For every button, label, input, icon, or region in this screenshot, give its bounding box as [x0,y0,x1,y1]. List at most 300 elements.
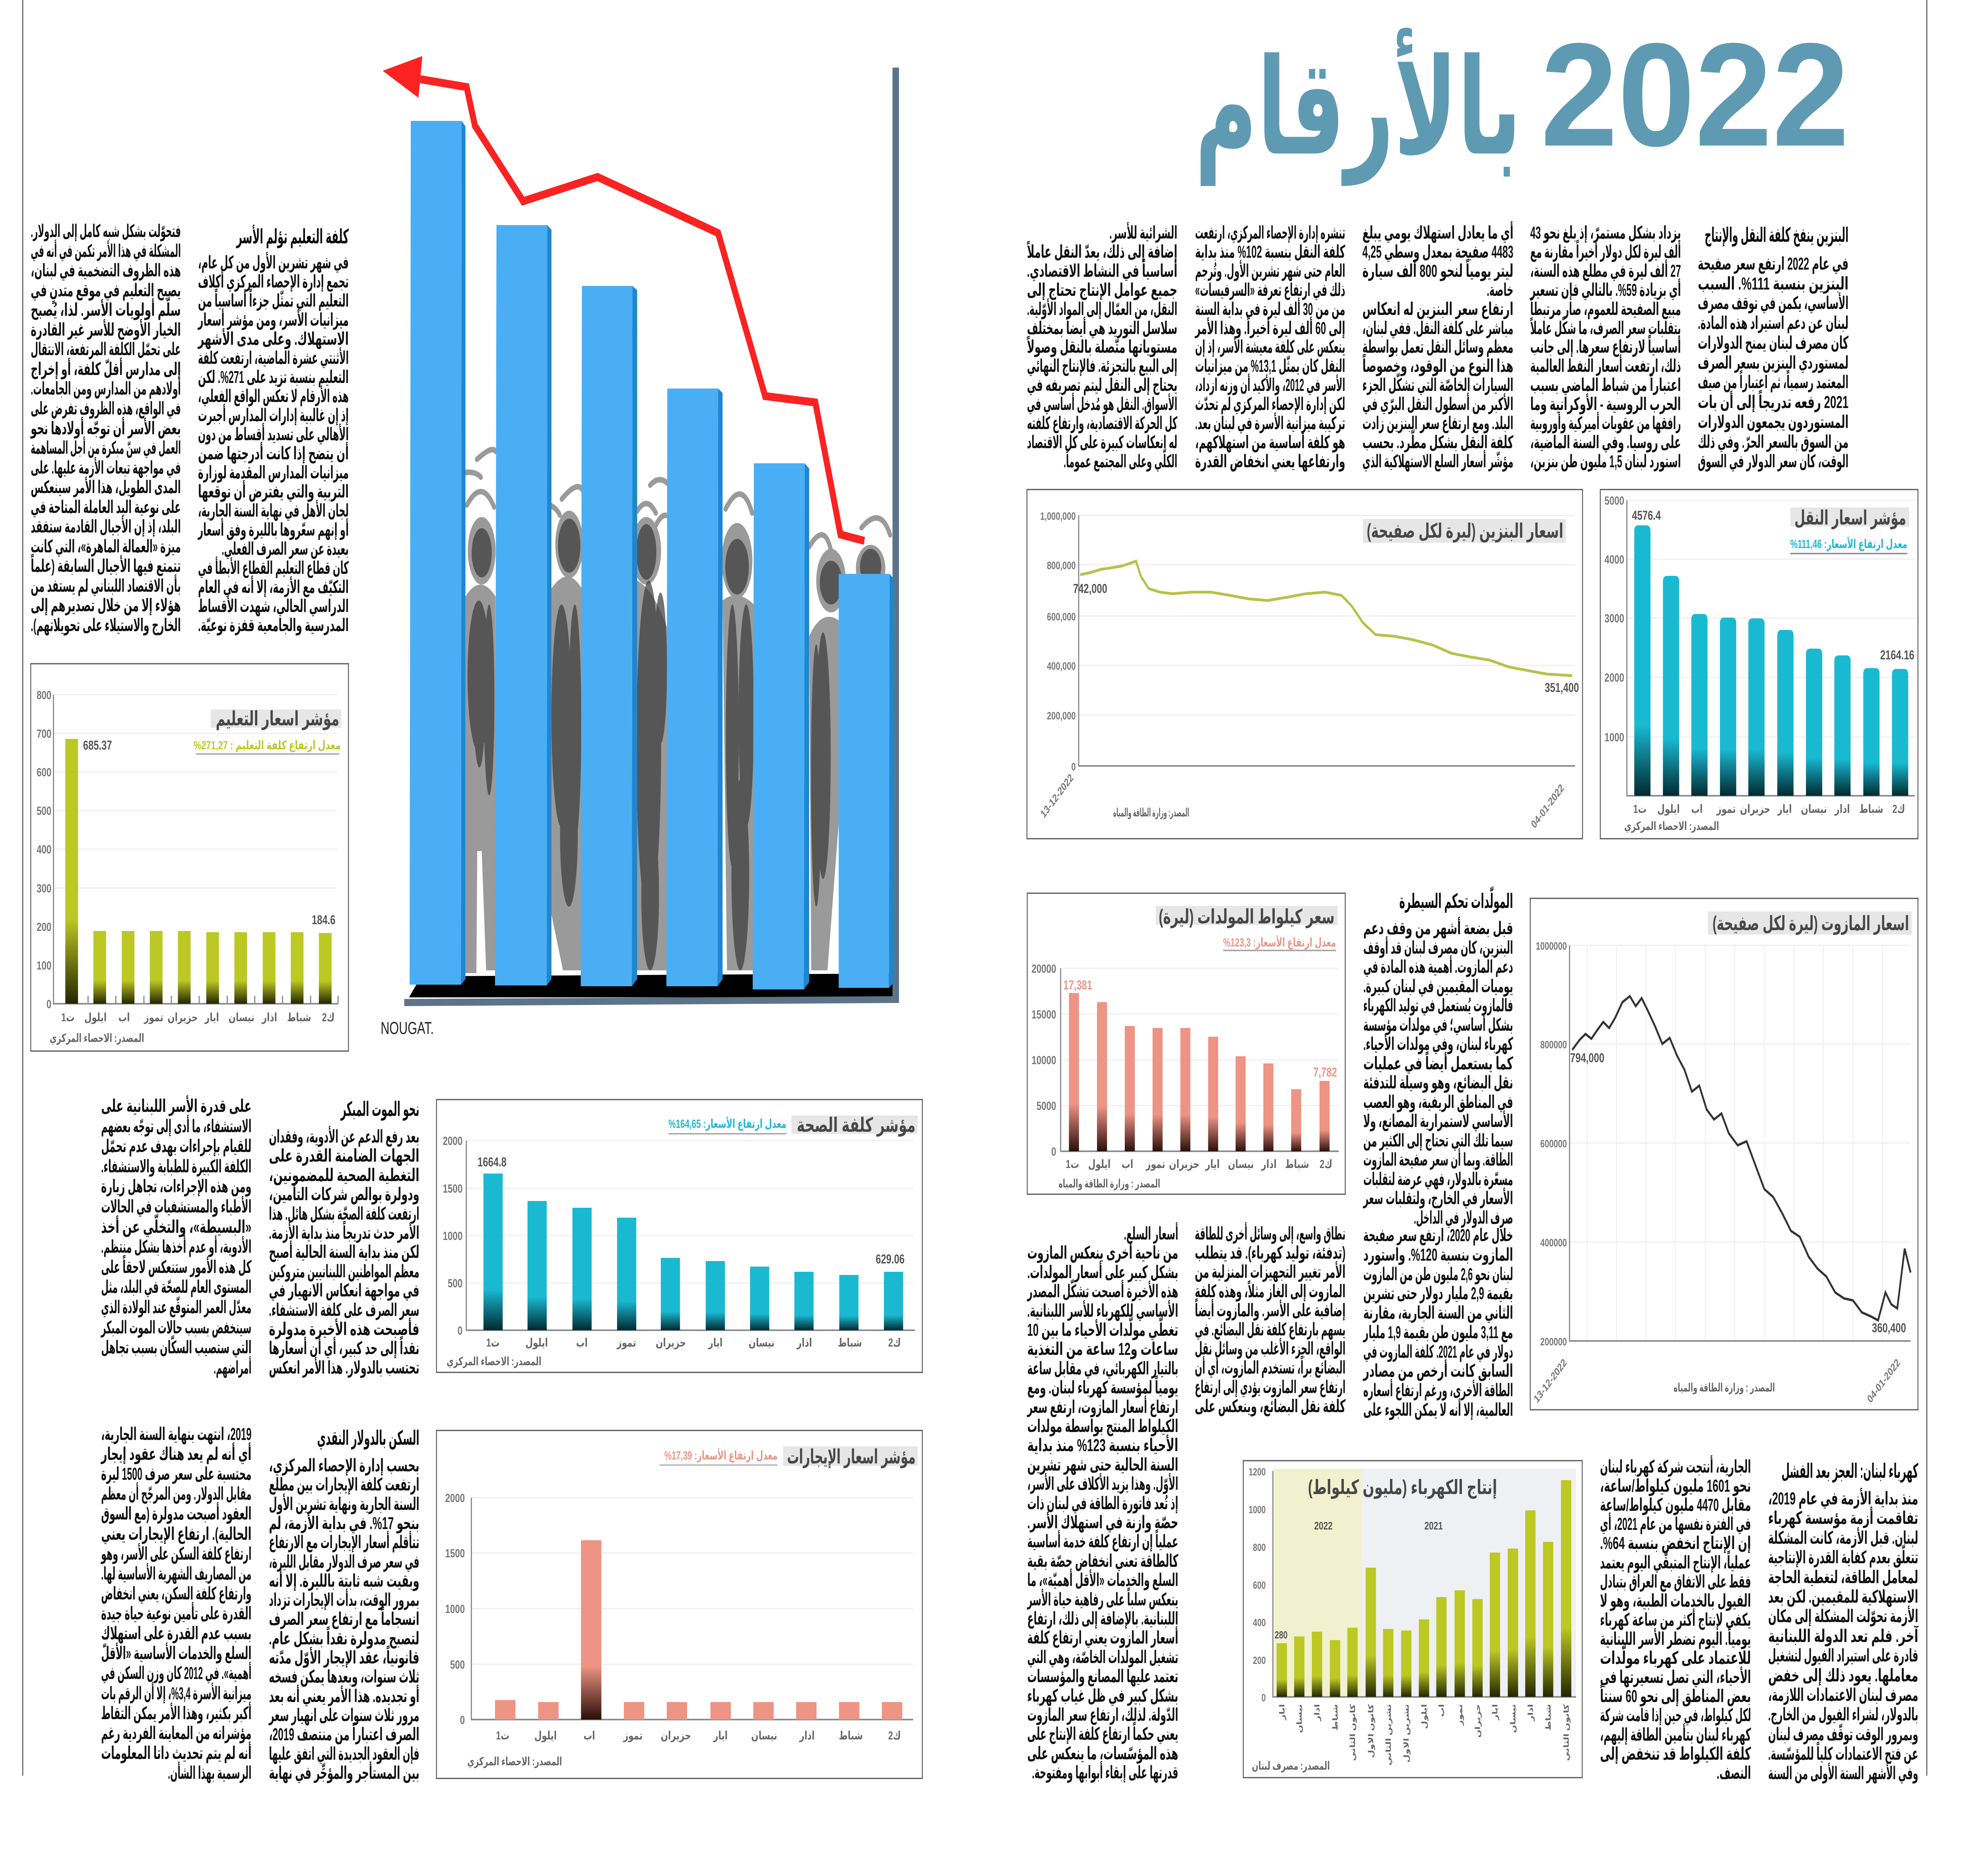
text block: column 5: يحتاج إلى النقل ليتم تصريفه في [1027,375,1177,395]
artist signature: NOUGAT. [381,1018,434,1038]
y axis labels: 0 [1071,761,1076,773]
month labels: نيسان [1509,1704,1517,1733]
text block: column 1: لبنان. قبل الأزمة، كانت المشكلة [1768,1527,1918,1548]
value labels: 360,400 [1872,1320,1906,1335]
text block: column 3: هذه المؤسّسات، ما ينعكس على [1027,1744,1178,1764]
text block: column 3: تشغيل المولدات الخاصّة، وهي التي [1027,1648,1178,1667]
bars [483,1174,903,1330]
month labels: ك2 [322,1011,335,1024]
text block: column 4 [1195,223,1345,472]
month labels: ايار [204,1011,219,1024]
text block: column 2: الحرب الروسية - الأوكرانية وما [1530,393,1681,414]
text block: column 3: الأساسي للكهرباء للأسر اللبنانية. [1027,1300,1178,1321]
text block: column 1: صرف الدولار في الداخل. [1414,1208,1513,1228]
text block: column 3: مؤشّر أسعار السلع الاستهلاكية الذي [1362,450,1513,472]
panel: education price chart [31,664,348,1051]
text block: column 2: الأدوية، أو عدم أخذها بشكل منتظم. [101,1235,252,1257]
text block: column 3: بشكل كبير في ظل غياب كهرباء [1027,1686,1178,1706]
text block: column 2: على روسيا. وفي السنة الماضية، [1530,433,1681,453]
blue bars [410,121,894,989]
bars [1069,993,1330,1151]
text block: column 4: تنشره إدارة الإحصاء المركزي، ارتفعت [1195,223,1345,243]
text block: column 2: ألف ليرة لكل دولار أخيراً مقارنة مع [1530,239,1681,262]
y axis labels: 200 [37,920,51,934]
panel: rent price chart [437,1430,922,1778]
text block: column 1: من السوق بالسعر الحرّ. وفي ذلك [1698,432,1848,452]
text block: column 1: ارتفعت كلفة الصحّة بشكل هائل. هذا [269,1204,419,1224]
chart title: سعر كيلواط المولدات (ليرة) [1159,906,1335,928]
y axis labels: 600000 [1540,1138,1567,1150]
y axis labels: 500 [448,1277,462,1290]
y axis labels: 5000 [1037,1099,1056,1113]
text block: column 1: ودولرة بوالص شركات التأمين، [269,1183,419,1205]
text block: column 2: ذلك، ارتفعت أسعار النفط العالمية [1530,354,1681,376]
text block: column 3: تعتمد عليها المصانع والمؤسسات [1027,1667,1178,1687]
text block: column 1: مسعّرة بالدولار، فهي عرضة لتقلبات [1363,1170,1513,1189]
y axis labels: 1000 [445,1602,465,1616]
text block: column 3: ليتر يومياً لنحو 800 ألف سيارة [1362,258,1513,281]
text block: column 3: معظم وسائل النقل تعمل بواسطة [1362,337,1513,357]
value labels: 7,782 [1313,1065,1337,1079]
text block: column 2: مؤشراته من المعاينة الفردية رغم [101,1724,252,1743]
text block: column 1: ميزانيات الأسر، ومن مؤشر أسعار [198,308,349,330]
text block: column 2: في مواجهة تبعات الأزمة عليها. على [31,457,181,478]
text block: column 3: خاصة. [1487,280,1513,300]
source: المصدر : وزارة الطاقة والمياه [1058,1178,1160,1191]
text block: column 2: نطاق واسع، إلى وسائل أخرى للطاقة [1195,1222,1345,1244]
panel: housing article [101,1424,419,1783]
text block: column 3: السيارات الخاصّة التي تشكّل الجزء [1362,373,1513,395]
text block: column 2: يسهم بارتفاع كلفة نقل البضائع. في [1195,1320,1345,1340]
value labels [1632,508,1914,662]
text block: column 2: عملياً، الإنتاج المتبقّي اليوم يعتمد [1600,1550,1751,1573]
chart title: إنتاج الكهرباء (مليون كيلواط) [1308,1477,1497,1499]
month labels: كانون الاول [1367,1704,1375,1758]
source: المصدر: الاحصاء المركزي [447,1355,542,1368]
text block: column 1: لمستوردي البنزين بسعر الصرف [1698,353,1848,373]
month labels: حزيران [661,1730,691,1743]
text block: column 3: الأحياء بنسبة ‭%123‬ منذ بداية [1027,1434,1178,1455]
text block: column 1: الطاقة. وبما أن سعر صفيحة المازوت [1363,1148,1513,1170]
text block: column 3: أسعار المازوت يعني ارتفاع كلفة [1027,1626,1178,1648]
text block: column 2: ومن هذه الإجراءات، تجاهل زيارة [101,1177,252,1197]
text block: column 1: إذ إن غالبية إدارات المدارس أجبرت [198,404,349,426]
panel: petrol article [1027,221,1848,472]
panel: generators article [1027,886,1513,1783]
text block: column 1: نقداً إلى حد كبير، أي أن أسعارها [269,1336,419,1358]
text block: column 1: لجان الأهل في نهاية السنة الجارية، [198,500,349,521]
y axis labels: 20000 [1031,962,1056,976]
text block: column 2: المدى الطويل، هذا الأمر سينعكس [31,476,181,497]
silhouettes [466,449,890,973]
text block: column 1: منذ بداية الأزمة في عام 2019، [1768,1488,1918,1509]
y axis labels: 1000000 [1536,940,1567,952]
text block: column 2: محتسبة على سعر صرف 1500 ليرة [101,1464,252,1484]
value labels: 1664.8 [478,1154,507,1169]
chart title: مؤشر اسعار التعليم [216,708,339,730]
month labels: ك2 [1320,1158,1332,1171]
text block: column 4: من من 30 ألف ليرة في بداية السنة [1195,297,1345,319]
text block: column 1: أو إنهم سعّروها بالليرة وفق أسعار [198,518,349,540]
text block: column 1: الاستهلاك. وعلى مدى الأشهر [198,328,349,349]
text block: column 2: أي بزيادة ‭%59‬. بالتالي فإن تسعير [1530,278,1681,300]
text block: column 1: مرور ثلاث سنوات على انهيار سعر [268,1706,419,1726]
text block: column 2: بعض المناطق إلى نحو 60 سنتاً [1600,1684,1751,1706]
text block: column 1: السنة الجارية ونهاية تشرين الأول [269,1493,419,1514]
text block: column 1: بشكل أساسي؛ في مولدات مؤسسة [1363,1013,1513,1035]
text block: column 1: التعليم بنسبة تزيد على ‭%271‬. لكن [198,367,349,387]
y axis labels: 300 [37,882,51,895]
text block: column 1: أو تجديده. هذا الأمر يعني أنه بعد [269,1685,419,1706]
text block: column 3: أي ما يعادل استهلاك يومي يبلغ [1362,221,1513,243]
month labels: حزيران [1740,803,1770,816]
text block: column 1 [268,1456,419,1783]
text block: column 5: جميع عوامل الإنتاج تحتاج إلى [1027,280,1177,300]
month labels: ايلول [84,1011,107,1024]
panel: education article [30,222,349,635]
text block: column 4: هو كلفة أساسية من استهلاكهم، [1195,431,1345,453]
panel: health cost chart [437,1100,922,1372]
text block: column 2: رافقها من عقوبات أميركية وأوروبية [1530,412,1681,433]
text block: column 2: بتقلبات سعر الصرف، ما شكّل عاملاً [1530,316,1681,338]
text block: column 4: النقل كان يمثّل ‭%13,1‬ من ميزانيات [1195,355,1345,376]
text block: column 2: أي أنه لم يعد هناك عقود إيجار [101,1442,252,1464]
text block: column 4: الأسر في 2012، والأكيد أن وزنه ازداد، [1195,373,1345,395]
text block: column 1: الثاني من السنة الجارية، مقارنة [1363,1303,1513,1323]
month labels: شباط [1545,1704,1552,1731]
text block: column 2: أهمية». في 2012 كان وزن السكن في [101,1662,252,1683]
text block: column 1: وفي الأشهر الستة الأولى من السنة [1768,1763,1918,1784]
text block: column 1: بقيمة 2,9 مليار دولار حتى تشرين [1363,1284,1513,1304]
heading: المولّدات تحكم السيطرة [1399,886,1513,913]
text block: column 2 [101,1095,252,1378]
month labels: ك2 [888,1730,901,1742]
heading: كلفة التعليم تؤلم الأسر [236,224,349,248]
source: المصدر: الاحصاء المركزي [467,1755,562,1768]
y axis labels: 200 [1253,1654,1266,1666]
value labels [1570,1050,1906,1335]
month labels: شباط [287,1011,311,1024]
month labels: اذار [1314,1704,1321,1722]
month labels: ايار [1205,1158,1220,1171]
text block: column 1: المدرسية والجامعية قفزة نوعيّة. [198,616,349,635]
y axis labels: 400 [1253,1617,1266,1628]
text block: column 1: العالمية، إلا أنه لا يمكن اللجوء على [1363,1398,1513,1420]
month labels: ايار [1777,803,1792,816]
text block: column 1: آخر. فلم تعد الدولة اللبنانية [1768,1625,1919,1646]
text block: column 1: التكيّف مع الأزمة، إلا أنه في العام [198,575,349,597]
text block: column 1: بالدولار، لشراء الفيول من الخارج. [1768,1705,1918,1725]
text block: column 2: كلفة الكيلواط قد تنخفض إلى [1600,1744,1751,1764]
text block: column 3: عملياً إن ارتفاع كلفة خدمة أساسية [1027,1529,1178,1552]
text block: column 1: كان مصرف لبنان يمنح الدولارات [1698,333,1848,353]
month labels: اذار [1261,1158,1277,1171]
text block: column 1: البنزين، كان مصرف لبنان قد أوقف [1363,936,1513,958]
month labels: ايار [708,1337,722,1349]
text block: column 1: الصرف اعتباراً من منتصف 2019، [269,1722,419,1745]
text block: column 3: الأوّل. وهذا يزيد الأكلاف على الأسر، [1027,1473,1178,1494]
y axis labels: 400 [37,843,51,856]
text block: column 2: الاستشفاء، ما أدى إلى توجّه بعضهم [101,1115,252,1137]
value labels: 184.6 [312,912,336,927]
value labels [1063,977,1337,1079]
text block: column 2: لكل كيلواط، في حين إذا قامت شركة [1600,1706,1751,1726]
text block: column 2 [30,222,181,635]
text block: column 2: الكلفة الكبيرة للطبابة والاستشفاء. [101,1157,252,1177]
text block: column 1: بعيدة عن سعر الصرف الفعلي. [221,539,349,559]
chart title: مؤشر كلفة الصحة [797,1114,916,1137]
text block: column 2: أمراضهم. [214,1356,252,1378]
text block: column 2: فتحوّلت بشكل شبه كامل إلى الدولار. [31,222,181,241]
text block: column 1: الأمر حدث تدريجاً منذ بداية الأزمة. [269,1220,419,1243]
text block: column 3: إذ تُعد فاتورة الطاقة في لبنان ذات [1027,1494,1178,1514]
text block: column 1: هذه الأرقام لا تعكس الواقع الفعلي، [198,385,349,406]
text block: column 3: ارتفاع أسعار المازوت، ارتفع سعر [1027,1395,1178,1417]
text block: column 1: تفاقمت أزمة مؤسسة كهرباء [1768,1506,1918,1528]
value labels: 17,381 [1063,977,1092,992]
text block: column 3: أسعار السلع. [1124,1222,1178,1244]
date labels: 04-01-2022 [1866,1356,1902,1405]
price line [1572,996,1910,1320]
text block: column 4: تركيبة ميزانية الأسرة في لبنان بعد. [1195,412,1345,433]
y axis labels: 0 [458,1324,462,1337]
text block: column 1: وبمرور الوقت توقّف مصرف لبنان [1768,1723,1918,1745]
text block: column 1: نقل البضائع، وهو وسيلة للتدفئة [1363,1073,1513,1093]
text block: column 2: بسبب عدم القدرة على استهلاك [101,1624,252,1644]
text block: column 2: يزداد بشكل مستمرّ، إذ بلغ نحو 43 [1530,223,1681,243]
month labels: نيسان [229,1011,254,1024]
y axis labels: 600 [37,766,51,779]
value labels [1073,581,1579,695]
text block: column 1 [198,252,349,635]
text block: column 1: الطاقة الأخرى، ورغم ارتفاع أسعاره [1363,1379,1513,1401]
text block: column 2: وارتفاع كلفة السكن، يعني انخفاض [101,1584,252,1604]
text block: column 5: الشرائية للأسر. [1109,222,1177,243]
bars [65,739,332,1004]
text block: column 1: 2021 رفعه تدريجاً إلى أن بات [1698,390,1848,412]
month labels: ك2 [888,1337,901,1349]
y axis labels: 0 [1051,1145,1056,1158]
month labels: نيسان [751,1730,777,1742]
value labels: 742,000 [1073,581,1107,596]
bars [495,1540,902,1720]
text block: column 1: مصرف لبنان الاعتمادات اللازمة، [1768,1685,1918,1705]
text block: column 1: لبنان عن دعم استيراد هذه المادة. [1698,313,1848,333]
text block: column 1: في عام 2022 ارتفع سعر صفيحة [1698,254,1848,274]
text block: column 1: الأساسي لاستمرارية المصانع، ولا [1363,1110,1513,1131]
text block: column 2: الأمر تغيير التجهيزات المنزلية من [1195,1261,1345,1282]
month labels: ت1 [486,1337,500,1349]
month labels: تموز [616,1337,636,1350]
text block: column 2: مبيع الصفيحة للعموم، صار مرتبطاً [1530,297,1681,319]
text block: column 2: النصف. [1717,1763,1751,1783]
y axis labels: 1000 [443,1229,462,1243]
date labels [1039,771,1566,831]
text block: column 3: 4483 صفيحة بمعدل وسطي 4,25 [1362,242,1513,262]
chart title: مؤشر اسعار النقل [1794,507,1906,529]
text block: column 1: مع 3,11 مليون طن بقيمة 1,9 مليار [1363,1323,1513,1343]
text block: column 1: خلال عام 2020، ارتفع سعر صفيحة [1363,1226,1513,1246]
heading: نحو الموت المبكر [340,1098,419,1121]
text block: column 1: بنحو ‭%17‬. في بداية الأزمة، لم [269,1512,419,1533]
text block: column 3: تغطّي مولّدات الأحياء ما بين 10 [1027,1317,1178,1340]
title: بالأرقام [1195,27,1521,187]
text block: column 1: ارتفعت كلفة الإيجارات بين مطلع [269,1475,419,1495]
bars [1634,525,1908,796]
text block: column 1: معاملها. يعود ذلك إلى خفض [1768,1666,1918,1686]
text block: column 1: التغطية الصحية للمضمونين، [269,1166,419,1185]
y axis labels: 1,000,000 [1040,510,1076,523]
value label: 280 [1275,1629,1287,1641]
axis frame [404,68,899,1006]
text block: column 2: العقود أصبحت مدولرة (مع السوق [101,1502,252,1524]
text block: column 1: المستوردون يجمعون الدولارات [1698,412,1848,432]
text block: column 1: قبل بضعة أشهر من وقف دعم [1363,917,1513,939]
y axis labels: 500 [450,1658,465,1671]
text block: column 1: كما يستعمل أيضاً في عمليات [1363,1051,1513,1073]
text block: column 1: بعد رفع الدعم عن الأدوية، وفقدان [269,1126,419,1147]
text block: column 1 [269,1126,419,1378]
text block: column 3: اللبنانية. بالإضافة إلى ذلك، ارتفاع [1027,1609,1178,1629]
source: المصدر: الاحصاء المركزي [1624,820,1719,833]
y axis labels [1248,1466,1266,1704]
month labels [1633,803,1905,816]
text block: column 1: بحسب إدارة الإحصاء المركزي، [269,1456,419,1476]
chart title: اسعار البنزين (ليرة لكل صفيحة) [1367,520,1563,542]
text block: column 2: هؤلاء إلا من خلال تصديرهم إلى [31,596,181,616]
year labels: 2021 [1424,1520,1443,1532]
value labels [478,1154,905,1266]
text block: column 2: اعتباراً من شباط الماضي بسبب [1530,373,1681,395]
text block: column 2: في الفترة نفسها من عام 2021، أي [1600,1512,1751,1534]
y axis labels: 1500 [445,1547,465,1560]
value labels [83,738,336,927]
y axis labels: 2000 [1604,671,1624,684]
text block: column 1: المازوت بنسبة ‭%120‬. واستورد [1363,1245,1513,1265]
text block: column 2: الجارية، أنتجت شركة كهرباء لبنان [1600,1455,1751,1477]
text block: column 3: قدرتها على إبقاء أبوابها ومفتوحة. [1032,1761,1178,1783]
text block: column 2: الحالية). ارتفاع الإيجارات يعني [101,1524,252,1544]
text block: column 1: تجمع إدارة الإحصاء المركزي أكلاف [198,270,349,292]
month labels: كانون الثاني [1563,1704,1571,1761]
month labels: تموز [1145,1158,1165,1171]
text block: column 1: قانونياً، عقد الإيجار الأوّل مدّته [269,1645,419,1668]
text block: column 5: سلاسل التوريد هي أيضاً بمختلف [1027,316,1177,338]
month labels: حزيران [656,1337,686,1350]
text block: column 1: قادرة على استيراد الفيول لتشغيل [1768,1646,1918,1666]
month labels: نيسان [1801,803,1827,816]
text block: column 2: إن الإنتاج انخفض بنسبة ‭%64‬. [1600,1533,1751,1553]
text block: column 3: هذه الأخيرة أصبحت تشكّل المصدر [1027,1279,1178,1302]
y axis labels: 800 [1253,1541,1266,1553]
text block: column 3: السنة الحالية حتى شهر تشرين [1027,1455,1178,1475]
text block: column 2: الواقع، الجزء الأغلب من وسائل نقل [1195,1338,1345,1359]
month labels: اذار [1834,803,1850,816]
text block: column 2: بأن الاقتصاد اللبناني لم يستفد من [31,574,181,596]
source: المصدر: الاحصاء المركزي [50,1032,144,1045]
text block: column 2: من المصاريف الشهرية الأساسية لها. [101,1563,252,1584]
text block: column 3: هذا النوع من الوقود، وخصوصاً [1362,354,1513,376]
date labels [1532,1356,1902,1405]
y axis labels [1040,510,1076,773]
month labels: شباط [839,1730,863,1742]
panel: electricity production chart [1243,1461,1582,1778]
month labels: ك2 [1893,803,1905,816]
red declining arrow [383,56,864,541]
text block: column 1: ثلاث سنوات، وبعدها يمكن فسخه [269,1667,419,1687]
text block: column 1: الوقت، كان سعر الدولار في السوق [1698,452,1848,472]
text block: column 1: سيما تلك التي تحتاج إلى الكثير من [1363,1131,1513,1151]
y axis labels: 1000 [1604,731,1624,744]
text block: column 2: أنه لم يتم تحديث داتا المعلومات [101,1741,252,1763]
panel: electricity article [1600,1455,1919,1784]
panel: petrol price line chart [1027,490,1582,839]
month labels: اذار [796,1337,812,1349]
text block: column 2: البضائع براً، تستخدم المازوت، أي أن [1195,1355,1345,1378]
month labels: اب [576,1337,588,1349]
month labels [61,1011,335,1024]
text block: column 2: الرسمية بهذا الشأن. [168,1761,252,1783]
y axis labels: 100 [37,959,51,972]
month labels: اذار [1527,1704,1535,1722]
text block: column 1: لبنان نحو 2,6 مليون طن من المازوت [1363,1265,1513,1285]
heading: السكن بالدولار النقدي [317,1427,419,1450]
text block: column 1: كان قطاع التعليم القطاع الأبطأ في [198,556,349,578]
chart title: اسعار المازوت (ليرة لكل صفيحة) [1712,913,1909,935]
month labels: نيسان [1228,1158,1254,1171]
text block: column 1: ميزانيات المدارس المقدمة لوزارة [198,463,349,483]
y axis labels: 1000 [1248,1504,1266,1516]
panel: health article [101,1095,419,1378]
text block: column 5: إلى البيع بالتجزئة. فالإنتاج النهائي [1027,356,1177,376]
text block: column 2: إضافية على الأسر. والمازوت أيضاً [1195,1298,1345,1321]
text block: column 5: له انعكاسات كبيرة على كل الاقتصاد [1027,433,1177,453]
source: المصدر: مصرف لبنان [1252,1760,1330,1773]
text block: column 1 [1768,1488,1919,1784]
month labels: اب [1122,1158,1133,1171]
month labels: ايلول [534,1730,557,1743]
y axis labels: 2000 [443,1134,462,1148]
text block: column 2: الأحياء، التي تصل تسعيرتها في [1600,1666,1751,1687]
month labels: ت1 [1066,1158,1079,1171]
text block: column 1: وبقيت شبه ثابتة بالليرة. إلا أنه [269,1569,419,1591]
text block: column 4: ينعكس على كلفة معيشة الأسر، إذ إن [1195,336,1345,357]
y axis labels [1031,962,1056,1158]
text block: column 1: لمعامل الطاقة، لتغطية الحاجة [1768,1568,1918,1587]
text block: column 2: أكبر بكثير، وهذا الأمر يمكن التقاط [101,1702,252,1724]
text block: column 1: الأسعار في الخارج، ولتقلبات سعر [1363,1187,1513,1209]
text block: column 1: تتعلّق بعدم كفاية القدرة الإنتاجية [1768,1544,1918,1568]
text block: column 5 [1027,222,1177,472]
text block: column 5: النقل، من العمّال إلى المواد الأوّلية. [1027,298,1177,319]
month labels: اذار [799,1730,815,1742]
text block: column 3: كلفة النقل بشكل مطّرد. بحسب [1362,429,1514,453]
text block: column 1: في سعر صرف الدولار مقابل الليرة، [269,1552,419,1572]
month labels: نيسان [749,1337,775,1349]
text block: column 2: للاعتماد على كهرباء مولّدات [1600,1645,1751,1668]
text block: column 2: التي ستصيب السكّان بسبب تجاهل [101,1335,252,1357]
text block: column 2: ميزانية الأسرة ‭%3,4‬، إلا أن الرقم بات [101,1682,252,1704]
text block: column 2 [1530,223,1681,472]
value labels: 794,000 [1570,1050,1604,1065]
text block: column 1: لكن منذ بداية السنة الحالية أصبح [269,1240,419,1262]
month labels: تشرين الاول [1403,1704,1410,1763]
year labels [1314,1520,1443,1532]
y axis labels: 600 [1253,1579,1266,1591]
chart subtitle: معدل ارتفاع الأسعار: ‭%123,3‬ [1223,935,1336,949]
value labels: 351,400 [1545,680,1579,695]
month labels: كانون الثاني [1349,1704,1357,1761]
